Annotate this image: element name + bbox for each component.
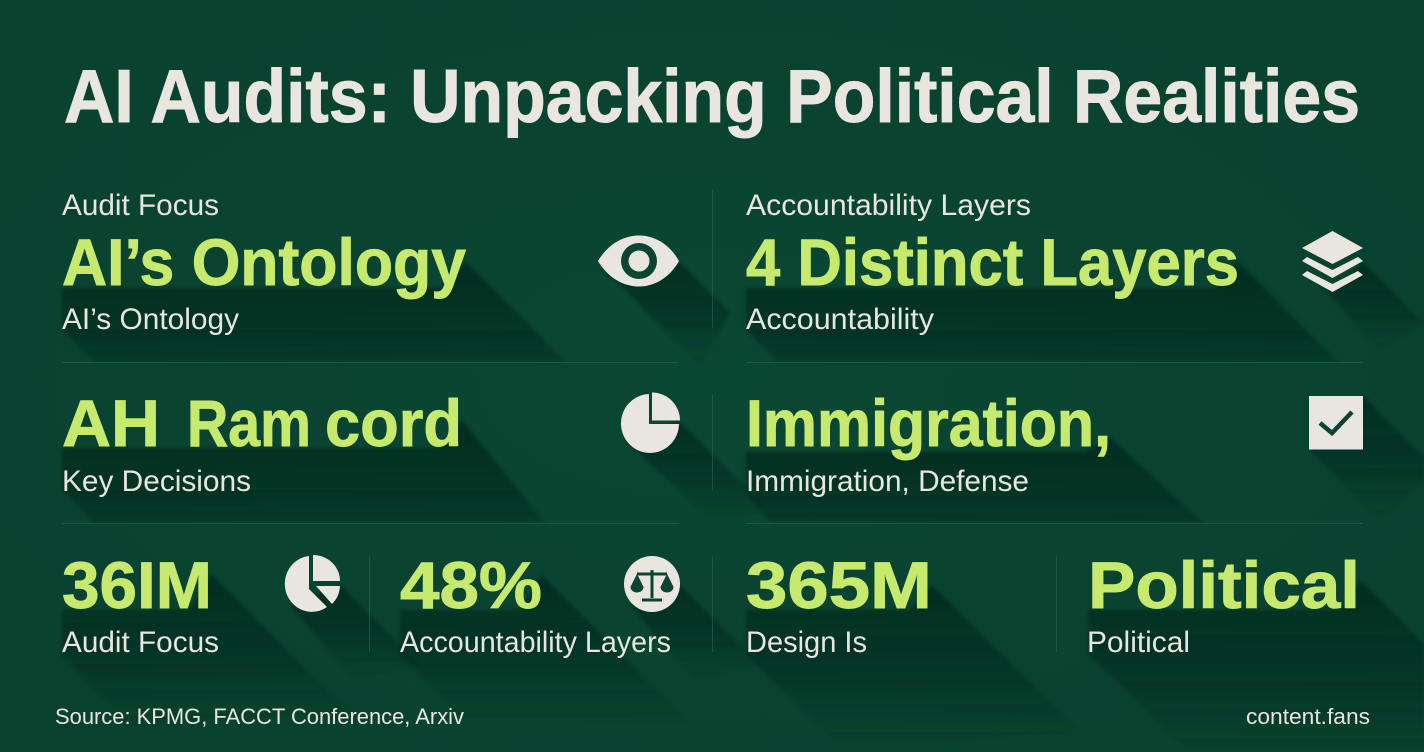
icon: pie chart [621, 392, 680, 453]
panel: key decisions [62, 386, 680, 498]
panel: audit focus [62, 189, 679, 336]
label: audit focus: Audit Focus [62, 189, 219, 222]
value: garbled record: cord [325, 386, 462, 460]
value: 4 distinct layers: 4 Distinct Layers [746, 225, 1239, 299]
dividers [62, 190, 1363, 652]
value: 365M: 365M [746, 548, 932, 622]
value: garbled record: AH [62, 386, 160, 460]
value: 36IM: 36IM [62, 548, 212, 622]
value: garbled record: Ram [187, 386, 311, 460]
value: garbled record [62, 386, 462, 460]
icon: segmented pie [285, 555, 340, 612]
value: AI's Ontology: AI’s Ontology [62, 225, 466, 299]
panel: stat 36IM [62, 548, 340, 659]
caption: political: Political [1087, 626, 1190, 659]
caption: accountability: Accountability [746, 303, 934, 336]
panel: stat 365M [746, 548, 932, 659]
value: political: Political [1088, 548, 1360, 622]
caption: design is: Design Is [746, 626, 867, 659]
icon: scales [624, 556, 680, 612]
caption: key decisions: Key Decisions [62, 465, 251, 498]
panel: stat political [1087, 548, 1360, 659]
caption: audit focus: Audit Focus [62, 626, 219, 659]
panel: immigration [746, 386, 1363, 498]
caption: AI's Ontology: AI’s Ontology [62, 303, 239, 336]
long shadows behind the text rows [62, 262, 1338, 523]
label: accountability layers: Accountability Layers [746, 189, 1031, 222]
title: AI Audits: Unpacking Political Realities [64, 54, 1360, 138]
icon: checkbox [1309, 396, 1363, 450]
value: 48%: 48% [400, 548, 542, 622]
caption: immigration, defense: Immigration, Defense [746, 465, 1029, 498]
panel: stat 48% [400, 548, 680, 659]
icon: eye [598, 236, 679, 286]
caption: accountability layers: Accountability Layers [400, 626, 671, 659]
panel: accountability layers [746, 189, 1363, 336]
brand credit: content.fans [1246, 704, 1370, 729]
icon: layers [1302, 231, 1363, 292]
value: immigration: Immigration, [746, 386, 1111, 460]
source note: Source: KPMG, FACCT Conference, Arxiv [55, 704, 464, 729]
long shadows fading out [62, 262, 1424, 752]
